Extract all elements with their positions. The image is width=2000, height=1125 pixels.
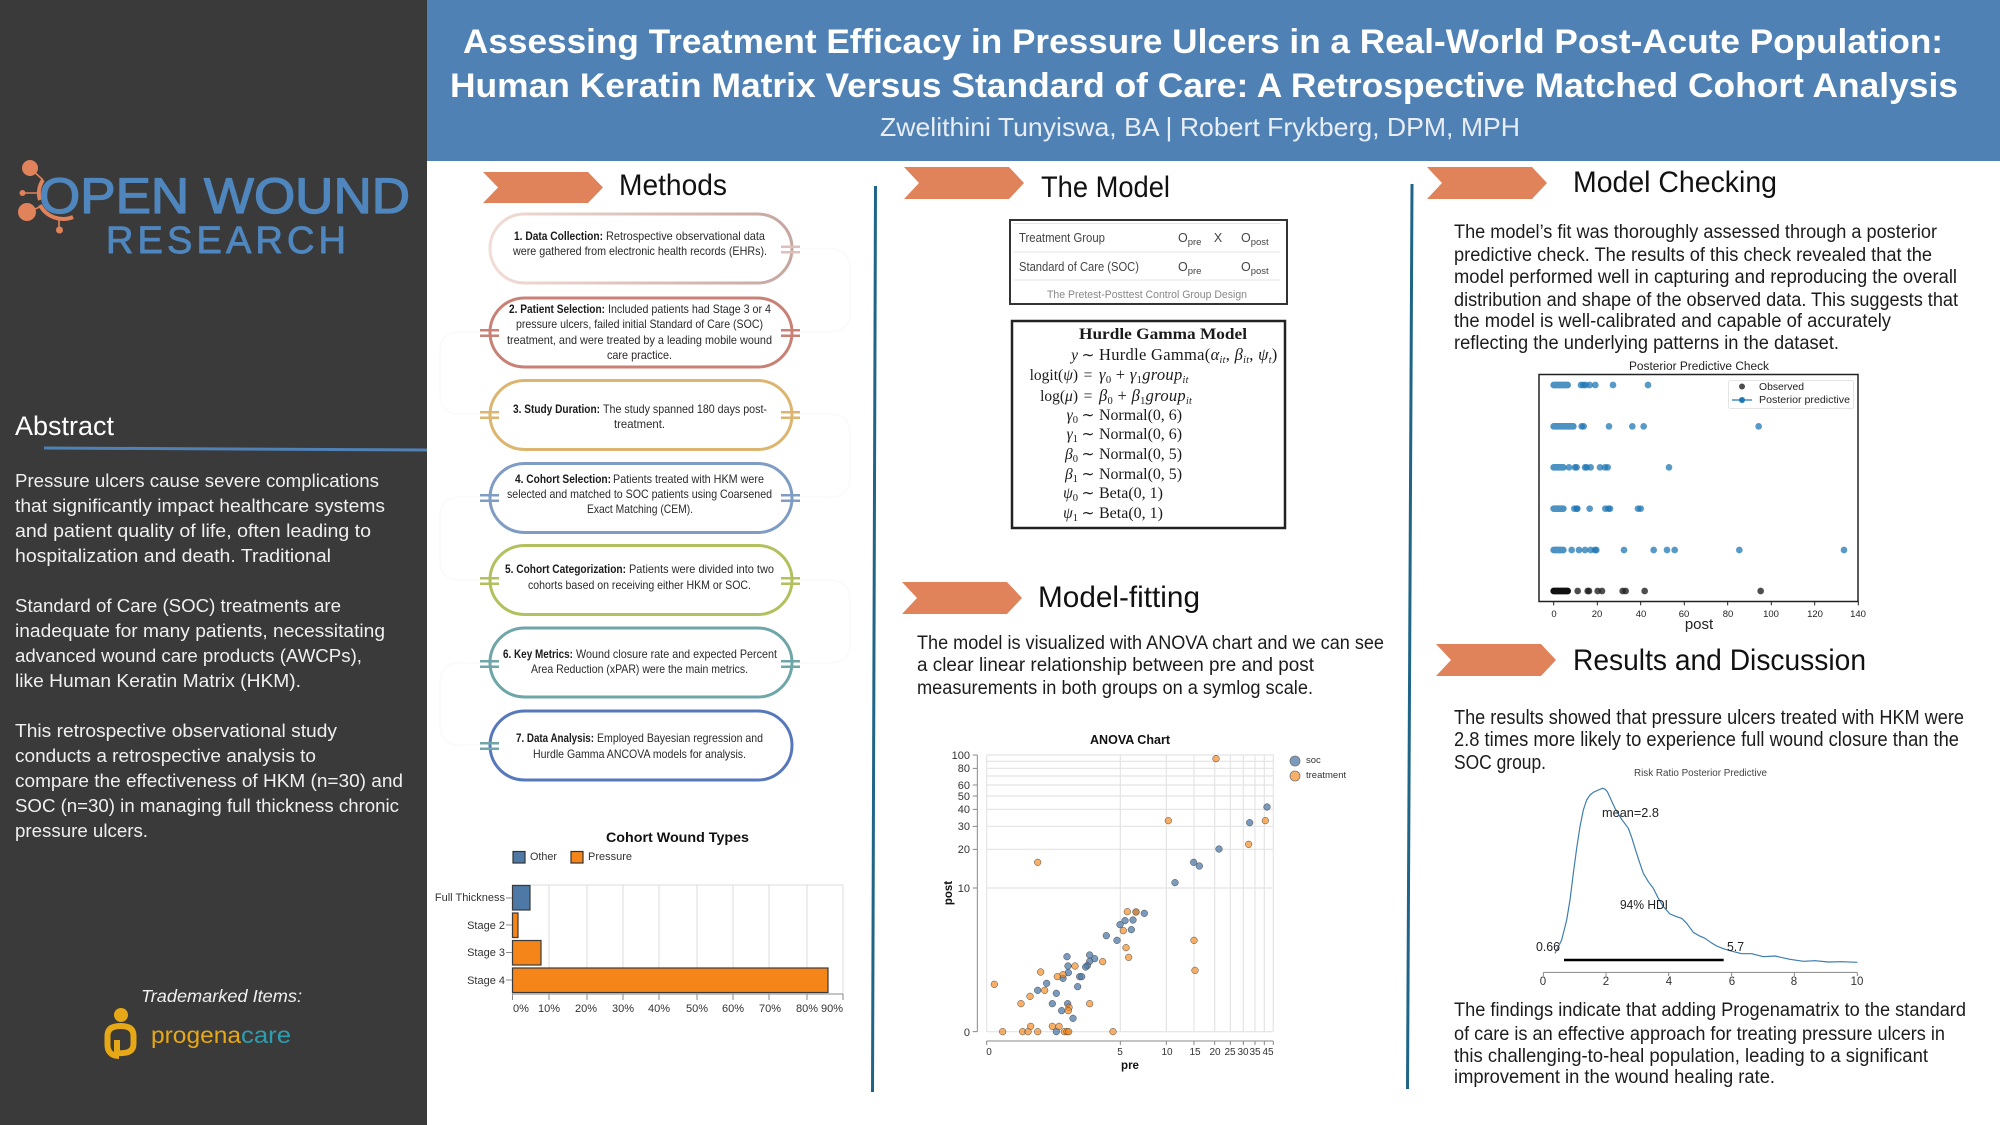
step 5: cohort categorization [480,546,800,614]
text block: abstract body: and patient quality of life, often leading to [15,520,371,541]
equations: hurdle gamma model: 1 [1073,434,1078,445]
step 2: patient selection: Included patients had Stage 3 or 4 [608,302,771,316]
table: pretest-posttest design: X [1214,231,1223,245]
equations: hurdle gamma model: β [1064,466,1073,483]
bar chart: cohort wound types: 40% [648,1003,670,1015]
scatter chart: ANOVA chart: 100 [952,750,970,762]
table: pretest-posttest design [1010,220,1287,304]
text block: abstract body [15,470,403,841]
table: pretest-posttest design: The Pretest-Posttest Control Group Design [1047,289,1247,301]
step 6: key metrics: 6. Key Metrics: [503,649,573,661]
caption: trademarked items: Trademarked Items: [141,986,302,1006]
bar chart: cohort wound types: Stage 2 [467,920,505,932]
icon: methods arrow [483,172,603,203]
table: pretest-posttest design: O [1241,260,1251,274]
dot plot: posterior predictive check: 0 [1551,609,1557,620]
bar chart: cohort wound types: 90% [821,1003,843,1015]
density chart: risk ratio posterior predictive: 4 [1666,976,1673,988]
icon: the model arrow [904,167,1024,199]
text block: findings [1454,1000,1966,1088]
title [450,23,1958,105]
text block: abstract body: compare the effectiveness of HKM (n=30) and [15,770,403,791]
step 2: patient selection [480,298,800,367]
heading: Abstract: Abstract [15,411,114,441]
dot plot: posterior predictive check: post [1685,616,1714,633]
density chart: risk ratio posterior predictive [1536,768,1863,988]
equations: hurdle gamma model [1012,321,1285,528]
step 6: key metrics: Wound closure rate and expected Percent [576,647,778,661]
bar chart: cohort wound types: Full Thickness [435,892,505,904]
text block: abstract body: pressure ulcers. [15,820,148,841]
title: Human Keratin Matrix Versus Standard of Care: A Retrospective Matched Cohort Analysis [450,67,1958,105]
density chart: risk ratio posterior predictive: mean=2.8 [1602,805,1659,820]
text block: abstract body: hospitalization and death. Traditional [15,545,331,566]
bar chart: cohort wound types: 20% [575,1003,597,1015]
equations: hurdle gamma model: Normal(0, 5) [1099,466,1182,483]
dot plot: posterior predictive check [1539,361,1866,633]
step 5: cohort categorization: Patients were divided into two [629,562,774,576]
scatter chart: ANOVA chart: 80 [958,763,970,775]
logo: progenacare: progena [151,1022,241,1048]
scatter chart: ANOVA chart: 40 [958,804,970,816]
dot plot: posterior predictive check: 80 [1723,609,1733,620]
text block: model checking description: reflecting the underlying patterns in the dataset. [1454,333,1839,354]
equations: hurdle gamma model: 1 [1137,375,1142,386]
equations: hurdle gamma model: ∼ [1082,426,1094,443]
equations: hurdle gamma model: t [1269,355,1272,366]
equations: hurdle gamma model: + [1113,386,1132,405]
equations: hurdle gamma model: it [1186,396,1192,407]
underline: abstract heading [44,448,427,450]
table: pretest-posttest design: post [1251,237,1269,248]
text block: findings: The findings indicate that adding Progenamatrix to the standard [1454,1000,1966,1021]
text block: model checking description: the model is well-calibrated and capable of accurately [1454,311,1891,332]
equations: hurdle gamma model: it [1220,355,1226,366]
scatter chart: ANOVA chart: ANOVA Chart [1090,733,1171,747]
legend: soc / treatment: treatment [1306,770,1346,781]
legend: observed / posterior predictive: Posterior predictive [1759,395,1850,406]
text block: abstract body: advanced wound care products (AWCPs), [15,645,362,666]
equations: hurdle gamma model: 1 [1073,474,1078,485]
table: pretest-posttest design: post [1251,266,1269,277]
scatter chart: ANOVA chart: 10 [1161,1047,1173,1058]
heading: Methods: Methods [619,169,727,202]
panel: model-fitting [902,581,1384,1072]
dot plot: posterior predictive check: 60 [1679,609,1689,620]
legend: observed / posterior predictive [1728,380,1854,408]
equations: hurdle gamma model: group [1142,365,1183,384]
logo: Open Wound Research [18,160,410,262]
equations: hurdle gamma model: ψ [1063,485,1073,502]
equations: hurdle gamma model: 1 [1140,396,1146,407]
column divider 2 [1408,184,1412,1089]
scatter chart: ANOVA chart: 15 [1189,1047,1201,1058]
bar chart: cohort wound types: 60% [722,1003,744,1015]
legend: soc / treatment [1290,755,1346,781]
column divider 1 [872,186,876,1092]
step 5: cohort categorization: cohorts based on receiving either HKM or SOC. [528,578,751,592]
density chart: risk ratio posterior predictive: 6 [1729,976,1735,988]
step 4: cohort selection [480,464,800,532]
step 7: data analysis: 7. Data Analysis: [516,733,594,745]
text block: findings: of care is an effective approach for treating pressure ulcers in [1454,1024,1945,1045]
equations: hurdle gamma model: ψ [1258,345,1269,364]
header banner [427,0,2000,161]
step 4: cohort selection: Patients treated with HKM were [613,472,764,486]
equations: hurdle gamma model: 0 [1073,493,1078,504]
step 1: data collection: were gathered from electronic health records (EHRs). [512,244,767,258]
scatter chart: ANOVA chart: 50 [958,791,970,803]
panel: methods [440,169,850,780]
logo: Open Wound Research: OPEN WOUND [39,168,410,224]
equations: hurdle gamma model: 0 [1073,454,1078,465]
step 7: data analysis [480,711,792,780]
legend: wound category: Pressure [588,851,632,863]
bar chart: cohort wound types: 0% [513,1003,529,1015]
scatter chart: ANOVA chart: 30 [958,821,970,833]
text block: model-fitting description: a clear linear relationship between pre and post [917,655,1315,676]
scatter chart: ANOVA chart: 45 [1262,1047,1274,1058]
scatter chart: ANOVA chart: 0 [986,1047,992,1058]
bar chart: cohort wound types: 50% [686,1003,708,1015]
bar chart: cohort wound types: Stage 3 [467,947,505,959]
scatter chart: ANOVA chart: 20 [958,844,970,856]
equations: hurdle gamma model: Normal(0, 5) [1099,446,1182,463]
text block: abstract body: inadequate for many patients, necessitating [15,620,385,641]
scatter chart: ANOVA chart: post [943,881,955,905]
bar chart: cohort wound types: 70% [759,1003,781,1015]
step 7: data analysis: Hurdle Gamma ANCOVA models for analysis. [533,747,746,761]
equations: hurdle gamma model: ∼ [1082,466,1094,483]
equations: hurdle gamma model: γ [1067,407,1074,424]
text block: model checking description: distribution and shape of the observed data. This suggests that [1454,290,1959,311]
step 1: data collection [490,214,800,283]
bar chart: cohort wound types: 10% [538,1003,560,1015]
text block: abstract body: SOC (n=30) in managing full thickness chronic [15,795,399,816]
equations: hurdle gamma model: β [1131,386,1141,405]
bar chart: cohort wound types: 80% [796,1003,818,1015]
equations: hurdle gamma model: Beta(0, 1) [1099,485,1163,502]
bar chart: cohort wound types: Stage 4 [467,975,505,987]
equations: hurdle gamma model: ∼ [1082,347,1094,364]
scatter chart: ANOVA chart: 60 [958,780,970,792]
scatter chart: ANOVA chart: 35 [1249,1047,1261,1058]
equations: hurdle gamma model: + [1111,365,1130,384]
text block: abstract body: Pressure ulcers cause severe complications [15,470,379,491]
equations: hurdle gamma model: Hurdle Gamma(α [1099,345,1220,364]
icon: model checking arrow [1427,167,1547,199]
panel: the model [904,167,1287,528]
equations: hurdle gamma model: y [1069,347,1078,364]
equations: hurdle gamma model: , [1226,345,1235,364]
heading: Model Checking: Model Checking [1573,166,1777,199]
text block: abstract body: like Human Keratin Matrix (HKM). [15,670,301,691]
equations: hurdle gamma model: Hurdle Gamma Model [1079,326,1248,343]
text block: model-fitting description: measurements in both groups on a symlog scale. [917,678,1313,699]
scatter chart: ANOVA chart: 25 [1224,1047,1236,1058]
step 3: study duration: treatment. [614,417,665,431]
equations: hurdle gamma model: log(μ) [1040,388,1078,405]
step 6: key metrics [480,628,800,697]
equations: hurdle gamma model: γ [1130,365,1137,384]
text block: results [1454,707,1964,774]
equations: hurdle gamma model: group [1146,386,1186,405]
density chart: risk ratio posterior predictive: 2 [1603,976,1609,988]
heading: Model-fitting: Model-fitting [1038,581,1200,614]
step 1: data collection: Retrospective observational data [606,229,765,243]
density chart: risk ratio posterior predictive: 8 [1791,976,1797,988]
text block: findings: improvement in the wound healing rate. [1454,1067,1775,1088]
panel: model checking [1427,166,1959,633]
equations: hurdle gamma model: ) [1272,345,1278,364]
text block: model checking description: model performed well in capturing and reproducing the overall [1454,267,1957,288]
step 1: data collection: 1. Data Collection: [514,231,603,243]
equations: hurdle gamma model: = [1084,388,1092,405]
density chart: risk ratio posterior predictive: 5.7 [1727,939,1744,954]
scatter chart: ANOVA chart: 0 [964,1027,970,1039]
table: pretest-posttest design: O [1241,231,1251,245]
equations: hurdle gamma model: β [1098,386,1108,405]
equations: hurdle gamma model: 1 [1073,513,1078,524]
table: pretest-posttest design: Standard of Care (SOC) [1019,260,1139,274]
equations: hurdle gamma model: β [1234,345,1244,364]
text block: abstract body: conducts a retrospective analysis to [15,745,316,766]
text block: model checking description: The model’s fit was thoroughly assessed through a posterior [1454,222,1938,243]
equations: hurdle gamma model: Normal(0, 6) [1099,426,1182,443]
text block: model checking description: predictive check. The results of this check revealed that the [1454,245,1932,266]
scatter chart: ANOVA chart: pre [1121,1060,1139,1072]
equations: hurdle gamma model: = [1084,367,1092,384]
legend: observed / posterior predictive: Observed [1759,382,1804,393]
icon: model-fitting arrow [902,582,1022,614]
equations: hurdle gamma model: , [1249,345,1258,364]
title: Assessing Treatment Efficacy in Pressure Ulcers in a Real-World Post-Acute Population: [463,23,1943,61]
density chart: risk ratio posterior predictive: 0.66 [1536,939,1560,954]
density chart: risk ratio posterior predictive: 94% HDI [1620,897,1668,912]
legend: wound category: Other [530,851,557,863]
scatter chart: ANOVA chart [943,733,1346,1072]
text block: model-fitting description [917,633,1384,699]
bar chart: cohort wound types: Cohort Wound Types [606,829,749,845]
text block: model-fitting description: The model is visualized with ANOVA chart and we can see [917,633,1384,654]
step 4: cohort selection: selected and matched to SOC patients using Coarsened [507,487,772,501]
text block: results: SOC group. [1454,752,1546,774]
scatter chart: ANOVA chart: 5 [1117,1047,1123,1058]
step 5: cohort categorization: 5. Cohort Categorization: [505,564,626,576]
logo: Open Wound Research: RESEARCH [106,220,346,262]
density chart: risk ratio posterior predictive: 10 [1851,976,1863,988]
equations: hurdle gamma model: Normal(0, 6) [1099,407,1182,424]
equations: hurdle gamma model: ∼ [1082,407,1094,424]
bar chart: cohort wound types [435,829,843,1015]
equations: hurdle gamma model: ∼ [1082,446,1094,463]
table: pretest-posttest design: pre [1188,237,1201,248]
step 6: key metrics: Area Reduction (xPAR) were the main metrics. [531,662,748,676]
equations: hurdle gamma model: 0 [1106,375,1111,386]
scatter chart: ANOVA chart: 30 [1237,1047,1249,1058]
logo: progenacare: care [241,1022,291,1048]
dot plot: posterior predictive check: 100 [1763,609,1779,620]
text block: abstract body: Standard of Care (SOC) treatments are [15,595,341,616]
dot plot: posterior predictive check: Posterior Predictive Check [1629,361,1769,373]
step 7: data analysis: Employed Bayesian regression and [597,731,763,745]
equations: hurdle gamma model: 0 [1073,415,1078,426]
equations: hurdle gamma model: it [1243,355,1249,366]
text block: results: 2.8 times more likely to experience full wound closure than the [1454,729,1959,751]
equations: hurdle gamma model: ∼ [1082,505,1094,522]
heading: The Model: The Model [1041,171,1170,204]
equations: hurdle gamma model: logit(ψ) [1030,367,1078,384]
step 3: study duration: 3. Study Duration: [513,404,600,416]
step 4: cohort selection: Exact Matching (CEM). [587,502,693,516]
icon: results arrow [1436,644,1556,676]
equations: hurdle gamma model: γ [1067,426,1074,443]
step 2: patient selection: treatment, and were treated by a leading mobile wound [507,333,772,347]
panel: results and discussion [1436,644,1966,1088]
authors: Zwelithini Tunyiswa, BA | Robert Frykberg, DPM, MPH [880,112,1520,142]
text block: model checking description [1454,222,1959,354]
step 3: study duration [480,380,800,450]
bar chart: cohort wound types: 30% [612,1003,634,1015]
step 2: patient selection: pressure ulcers, failed initial Standard of Care (SOC) [516,317,763,331]
equations: hurdle gamma model: Beta(0, 1) [1099,505,1163,522]
scatter chart: ANOVA chart: 10 [958,883,970,895]
dot plot: posterior predictive check: 40 [1636,609,1646,620]
dot plot: posterior predictive check: 20 [1592,609,1602,620]
equations: hurdle gamma model: it [1183,375,1189,386]
heading: Results and Discussion: Results and Discussion [1573,644,1866,677]
equations: hurdle gamma model: ∼ [1082,485,1094,502]
step 4: cohort selection: 4. Cohort Selection: [515,474,611,486]
scatter chart: ANOVA chart: 20 [1209,1047,1221,1058]
logo: progenacare [108,1008,291,1056]
panel: left sidebar [0,0,427,1125]
step 2: patient selection: care practice. [607,348,672,362]
table: pretest-posttest design: O [1178,260,1188,274]
density chart: risk ratio posterior predictive: 0 [1540,976,1546,988]
equations: hurdle gamma model: β [1064,446,1073,463]
text block: abstract body: that significantly impact healthcare systems [15,495,385,516]
equations: hurdle gamma model: γ [1099,365,1106,384]
dot plot: posterior predictive check: 120 [1807,609,1823,620]
table: pretest-posttest design: Treatment Group [1019,231,1105,245]
equations: hurdle gamma model: 0 [1108,396,1113,407]
density chart: risk ratio posterior predictive: Risk Ratio Posterior Predictive [1634,768,1767,779]
step 2: patient selection: 2. Patient Selection: [509,304,605,316]
legend: soc / treatment: soc [1306,755,1321,766]
table: pretest-posttest design: O [1178,231,1188,245]
dot plot: posterior predictive check: 140 [1850,609,1866,620]
step 3: study duration: The study spanned 180 days post- [603,402,767,416]
table: pretest-posttest design: pre [1188,266,1201,277]
text block: results: The results showed that pressure ulcers treated with HKM were [1454,707,1964,729]
legend: wound category [513,851,632,863]
text block: findings: this challenging-to-heal population, leading to a significant [1454,1046,1929,1067]
bars [512,886,828,992]
text block: abstract body: This retrospective observational study [15,720,338,741]
equations: hurdle gamma model: ψ [1063,505,1073,522]
